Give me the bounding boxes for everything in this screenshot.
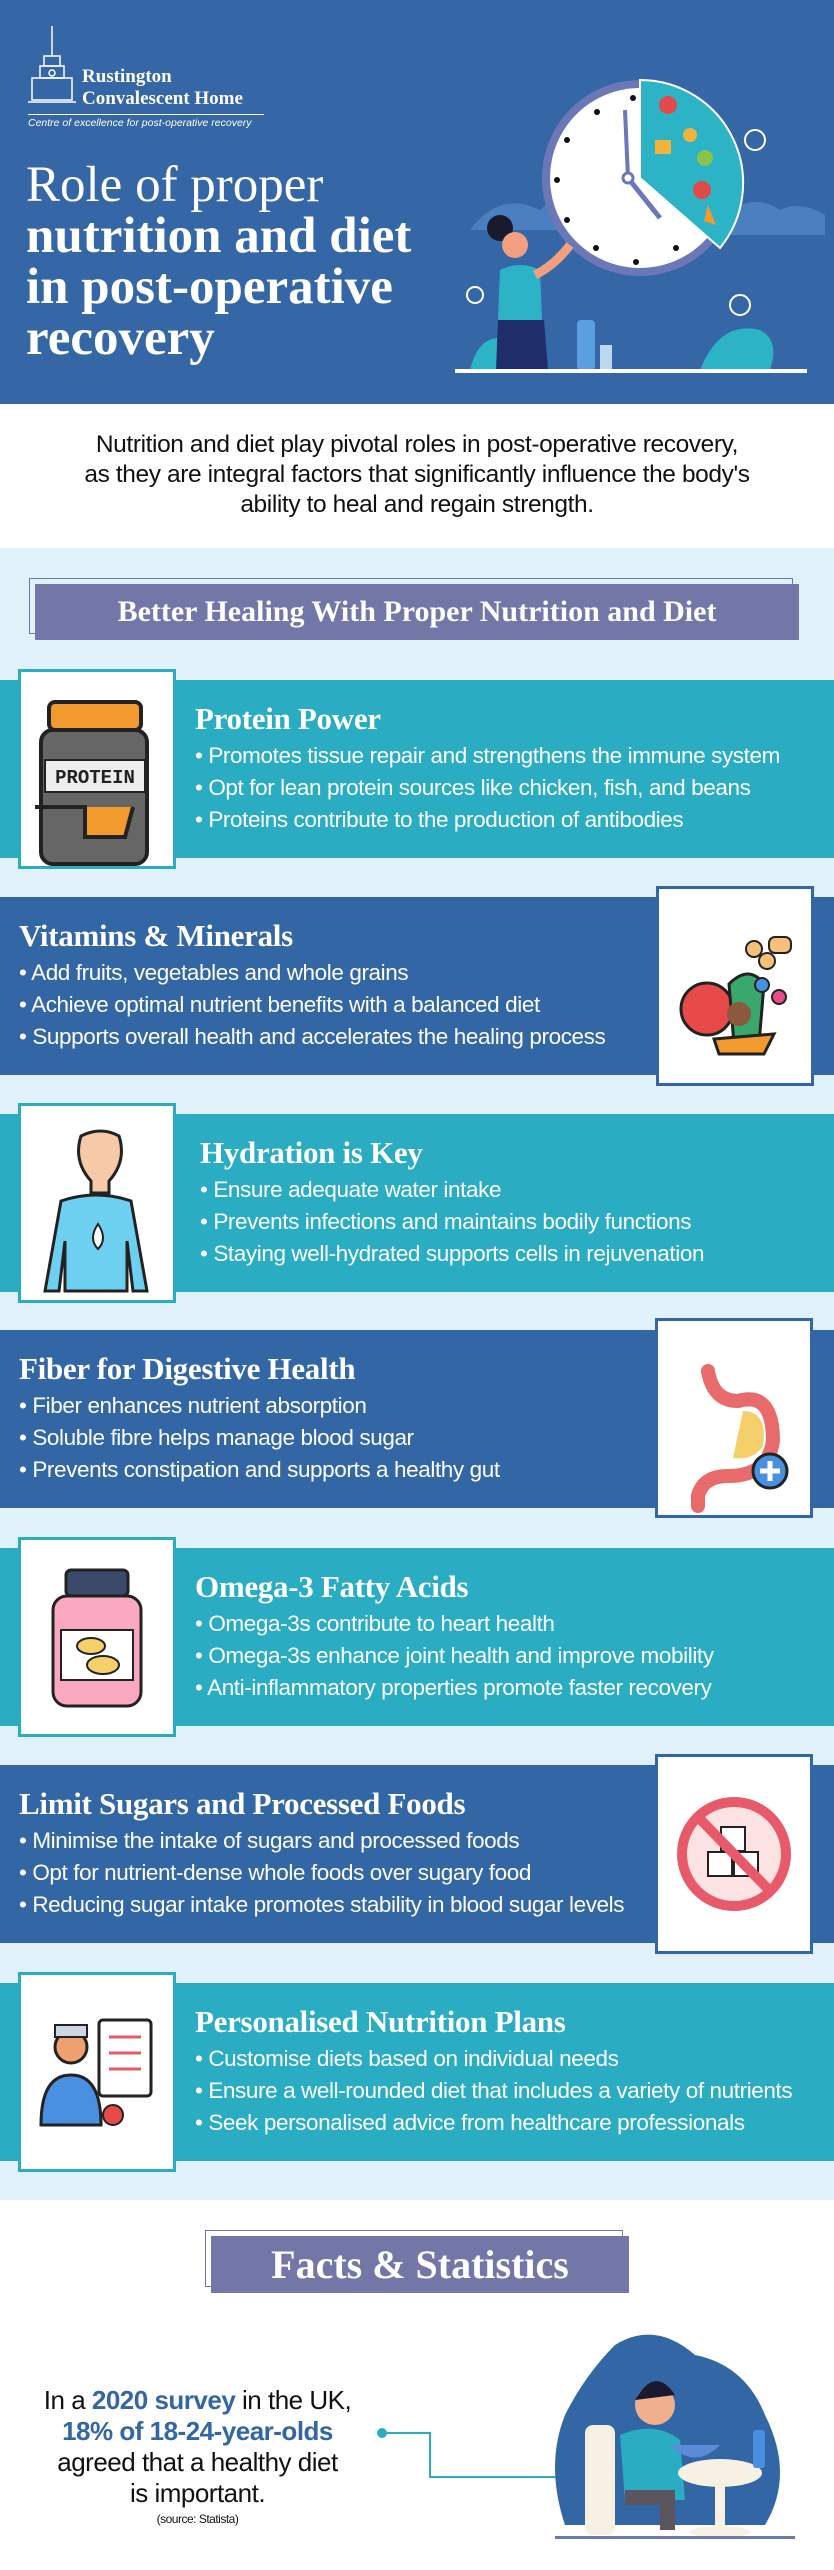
row: Omega-3 (0, 1548, 834, 1726)
text: Sugars: • Reducing sugar intake promotes stability in blood sugar levels (19, 1892, 624, 1917)
text: Hydration: • Prevents infections and maintains bodily functions (200, 1209, 691, 1234)
stat text: 18% of 18-24-year-olds (62, 2416, 333, 2446)
header panel (0, 0, 834, 404)
banner: Facts & Statistics (205, 2230, 629, 2293)
banner: Facts & Statistics: Facts & Statistics (271, 2242, 569, 2287)
icon: protein jar: PROTEIN (55, 767, 135, 789)
text: Vitamins (19, 918, 605, 1049)
stat text: is important. (130, 2478, 265, 2508)
icon: omega-3 bottle (18, 1537, 176, 1737)
title: nutrition and diet (26, 208, 411, 264)
text: Omega-3: • Omega-3s contribute to heart health (195, 1611, 555, 1636)
title: Role of proper (26, 157, 323, 213)
banner: Better Healing: Better Healing With Proper Nutrition and Diet (118, 595, 716, 628)
illustration: clock and woman (455, 79, 825, 373)
logo: Convalescent Home (82, 88, 243, 109)
text: Omega-3 (195, 1569, 714, 1700)
illustration: boy eating (555, 2334, 795, 2539)
logo (28, 26, 264, 129)
text: Personalised: • Seek personalised advice from healthcare professionals (195, 2110, 745, 2135)
text: Fiber: • Fiber enhances nutrient absorption (19, 1393, 366, 1418)
text: Protein Power: • Proteins contribute to the production of antibodies (195, 807, 683, 832)
row: Limit Sugars (0, 1765, 834, 1943)
text: Personalised (195, 2004, 792, 2135)
stat text: (source: Statista) (157, 2512, 238, 2526)
text: Hydration: • Staying well-hydrated supports cells in rejuvenation (200, 1241, 704, 1266)
logo: Centre of excellence for post-operative recovery (28, 117, 252, 129)
text: Protein Power: Protein Power (195, 701, 381, 736)
text: Protein Power: • Promotes tissue repair and strengthens the immune system (195, 743, 780, 768)
row: Personalised Nutrition Plans (0, 1983, 834, 2161)
intro text (84, 431, 750, 518)
row: Fiber for Digestive Health (0, 1330, 834, 1508)
text: Sugars: • Minimise the intake of sugars and processed foods (19, 1828, 519, 1853)
text: Omega-3: • Omega-3s enhance joint health and improve mobility (195, 1643, 714, 1668)
row: Hydration is Key (0, 1114, 834, 1292)
banner: Better Healing (29, 578, 799, 640)
text: Personalised: • Customise diets based on individual needs (195, 2046, 618, 2071)
connector arrow (377, 2428, 556, 2478)
text: Sugars: • Opt for nutrient-dense whole foods over sugary food (19, 1860, 531, 1885)
text: Omega-3: • Anti-inflammatory properties promote faster recovery (195, 1675, 711, 1700)
icon: stomach (655, 1318, 813, 1518)
icon: protein jar (18, 669, 176, 869)
icon: nutritionist (18, 1972, 176, 2172)
text: Protein Power (195, 701, 780, 832)
row: Vitamins & Minerals (0, 897, 834, 1075)
logo: Rustington (82, 66, 172, 87)
text: Vitamins: • Achieve optimal nutrient benefits with a balanced diet (19, 992, 540, 1017)
text: Hydration: • Ensure adequate water intake (200, 1177, 501, 1202)
text: Personalised: Personalised Nutrition Plans (195, 2004, 566, 2039)
text: Omega-3: Omega-3 Fatty Acids (195, 1569, 468, 1604)
text: Fiber (19, 1351, 500, 1482)
text: Protein Power: • Opt for lean protein sources like chicken, fish, and beans (195, 775, 750, 800)
text: Sugars: Limit Sugars and Processed Foods (19, 1786, 465, 1821)
intro text: ability to heal and regain strength. (240, 491, 594, 518)
stat text (44, 2385, 351, 2526)
text: Fiber: Fiber for Digestive Health (19, 1351, 355, 1386)
intro text: as they are integral factors that significantly influence the body's (84, 461, 750, 488)
icon: fruits and vitamins (656, 886, 814, 1086)
text: Sugars (19, 1786, 624, 1917)
text: Vitamins: • Add fruits, vegetables and whole grains (19, 960, 408, 985)
text: Fiber: • Soluble fibre helps manage blood sugar (19, 1425, 414, 1450)
text: Personalised: • Ensure a well-rounded diet that includes a variety of nutrients (195, 2078, 792, 2103)
stat text: agreed that a healthy diet (57, 2447, 338, 2477)
row: Protein Power (0, 680, 834, 858)
icon: no sugar (655, 1754, 813, 1954)
text: Vitamins: Vitamins & Minerals (19, 918, 293, 953)
text: Hydration: Hydration is Key (200, 1135, 423, 1170)
text: Hydration (200, 1135, 704, 1266)
title: in post-operative (26, 259, 393, 315)
title (26, 157, 412, 366)
light blue section (0, 548, 834, 2200)
stat text: In a 2020 survey in the UK, (44, 2385, 351, 2415)
intro text: Nutrition and diet play pivotal roles in post-operative recovery, (96, 431, 738, 458)
icon: hydrated body (18, 1103, 176, 1303)
text: Vitamins: • Supports overall health and accelerates the healing process (19, 1024, 605, 1049)
title: recovery (26, 310, 215, 366)
text: Fiber: • Prevents constipation and supports a healthy gut (19, 1457, 500, 1482)
